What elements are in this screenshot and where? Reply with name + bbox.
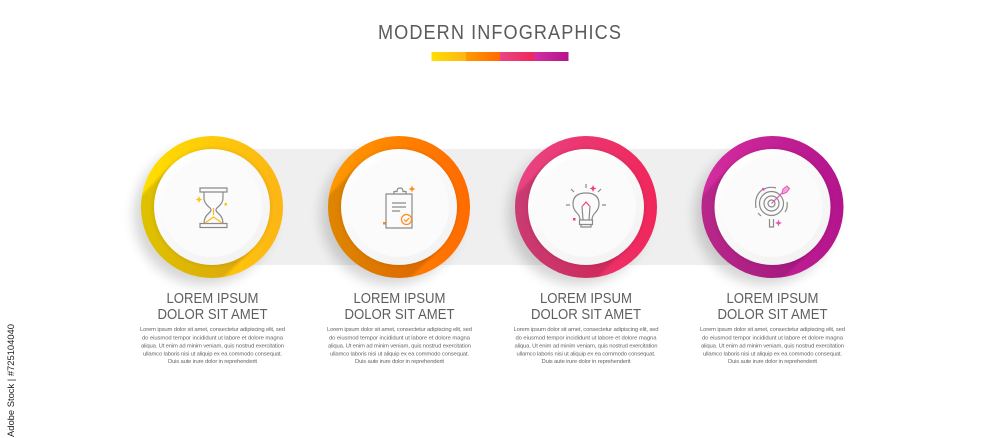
step 4 body text: Lorem ipsum dolor sit amet, consectetur adipiscing elit, sed: [700, 327, 845, 333]
step 3 outer shadow: [508, 145, 648, 285]
icon: hourglass: [196, 188, 227, 228]
step 1 heading: [158, 291, 268, 323]
step 2 ring: [328, 136, 470, 278]
step 1 body text: [140, 327, 285, 365]
step 1 outer shadow: [134, 145, 274, 285]
step 3: [504, 136, 658, 364]
step 4 body text: do eiusmod tempor incididunt ut labore et dolore magna: [702, 336, 844, 342]
icon: clipboard: [383, 186, 416, 228]
step 2 heading: LOREM IPSUM: [354, 291, 446, 307]
step 3 body text: Lorem ipsum dolor sit amet, consectetur adipiscing elit, sed: [514, 327, 658, 333]
step 4 body text: aliqua. Ut enim ad minim veniam, quis nostrud exercitation: [701, 344, 844, 350]
step 2 heading: [344, 291, 455, 323]
step 4 heading: [718, 291, 828, 323]
step 4: [690, 136, 845, 364]
step 4 body text: Duis aute irure dolor in reprehenderit: [728, 359, 817, 365]
icon: target with arrow: [756, 186, 790, 227]
step 3 ring: [515, 136, 657, 278]
step 3 disc: [528, 148, 644, 266]
connecting grey band: [212, 149, 772, 265]
step 3 heading: LOREM IPSUM: [540, 291, 632, 307]
step 3 body text: ullamco laboris nisi ut aliquip ex ea commodo consequat.: [516, 352, 656, 358]
step 3 ring shade: [515, 166, 626, 278]
step 2 body text: aliqua. Ut enim ad minim veniam, quis nostrud exercitation: [328, 344, 471, 350]
icon: light bulb: [566, 184, 606, 227]
title colour bar: [432, 52, 568, 61]
step 3 body text: Duis aute irure dolor in reprehenderit: [542, 359, 631, 365]
step 3 body text: aliqua. Ut enim ad minim veniam, quis nostrud exercitation: [514, 344, 658, 350]
step 2 outer shadow: [321, 145, 461, 285]
step 4 ring: [702, 136, 844, 278]
step 2 disc: [340, 148, 458, 266]
step 4 disc: [714, 148, 831, 266]
step 3 body text: [514, 327, 658, 365]
step 3 heading: [531, 291, 641, 323]
step 1 body text: aliqua. Ut enim ad minim veniam, quis nostrud exercitation: [141, 344, 284, 350]
step 4 heading: LOREM IPSUM: [726, 291, 818, 307]
stock credit: Adobe Stock | #725104040: [6, 324, 17, 437]
step 2 ring shade: [328, 166, 440, 278]
step 1 body text: ullamco laboris nisi ut aliquip ex ea commodo consequat.: [143, 352, 282, 358]
step 1 body text: Lorem ipsum dolor sit amet, consectetur adipiscing elit, sed: [140, 327, 285, 333]
step 2 heading: DOLOR SIT AMET: [344, 307, 455, 323]
step 1 body text: do eiusmod tempor incididunt ut labore et dolore magna: [142, 336, 284, 342]
step 1 heading: DOLOR SIT AMET: [158, 307, 268, 323]
step 1 body text: Duis aute irure dolor in reprehenderit: [168, 359, 257, 365]
title: MODERN INFOGRAPHICS: [378, 22, 622, 44]
step 4 body text: [700, 327, 845, 365]
step 2 body text: Duis aute irure dolor in reprehenderit: [355, 359, 444, 365]
step 2: [316, 136, 472, 364]
step 4 body text: ullamco laboris nisi ut aliquip ex ea commodo consequat.: [703, 352, 842, 358]
step 2 body text: Lorem ipsum dolor sit amet, consectetur adipiscing elit, sed: [327, 327, 472, 333]
step 1 ring shade: [141, 166, 253, 278]
step 2 body text: ullamco laboris nisi ut aliquip ex ea commodo consequat.: [330, 352, 469, 358]
step 1 disc: [154, 148, 270, 266]
step 2 body text: do eiusmod tempor incididunt ut labore et dolore magna: [329, 336, 471, 342]
step 2 body text: [327, 327, 472, 365]
step 4 outer shadow: [694, 145, 834, 285]
step 1 heading: LOREM IPSUM: [166, 291, 258, 307]
step 4 heading: DOLOR SIT AMET: [718, 307, 828, 323]
step 3 heading: DOLOR SIT AMET: [531, 307, 641, 323]
step 1 ring: [141, 136, 283, 278]
step 3 body text: do eiusmod tempor incididunt ut labore et dolore magna: [516, 336, 657, 342]
step 4 ring shade: [702, 167, 812, 278]
step 1: [130, 136, 285, 364]
